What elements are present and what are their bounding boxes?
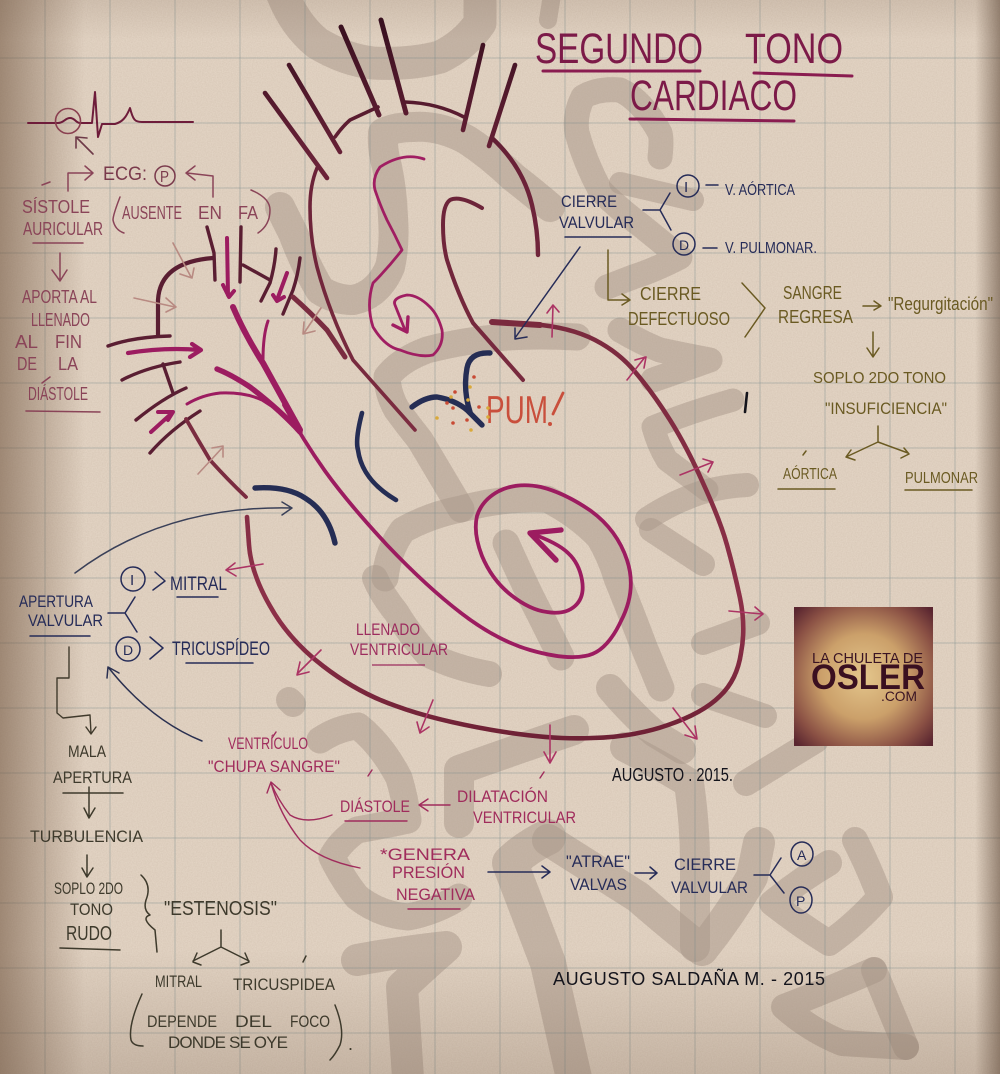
diastole chain: PRESIÓN: [392, 863, 465, 882]
cierre valvular block: VALVULAR: [559, 213, 634, 232]
llenado ventricular label: [350, 620, 448, 665]
atrae valvas block: P: [796, 893, 805, 909]
diastole chain: [208, 732, 576, 909]
mala apertura chain: TONO: [70, 900, 113, 919]
apertura valvular block: VALVULAR: [28, 611, 103, 630]
left notes: sistole auricular: FA: [238, 203, 258, 223]
date note: AUGUSTO . 2015.: [612, 765, 733, 785]
diastole chain: *GENERA: [380, 845, 471, 864]
cierre valvular block: CIERRE: [561, 192, 617, 211]
logo: la chuleta de osler: LA CHULETA DE: [812, 650, 923, 667]
apertura valvular block: TRICUSPÍDEO: [172, 639, 270, 660]
mala apertura chain: DEPENDE: [147, 1012, 217, 1031]
cierre defectuoso block: AÓRTICA: [783, 464, 837, 483]
mala apertura chain: .: [348, 1034, 353, 1054]
cierre defectuoso block: CIERRE: [640, 284, 701, 304]
PUM exclamation: [435, 375, 563, 432]
llenado ventricular label: VENTRICULAR: [350, 640, 448, 659]
left notes: sistole auricular: ECG:: [103, 164, 147, 185]
left notes: sistole auricular: FIN: [55, 332, 82, 352]
left notes: sistole auricular: AUSENTE: [122, 203, 182, 223]
left notes: sistole auricular: APORTA AL: [22, 287, 97, 307]
mala apertura chain: APERTURA: [53, 768, 133, 787]
mala apertura chain: MITRAL: [155, 972, 202, 991]
mala apertura chain: FOCO: [290, 1012, 330, 1031]
diastole chain: VENTRICULAR: [473, 808, 576, 827]
dilation arrows around ventricle: [134, 243, 763, 763]
mala apertura chain: DONDE SE OYE: [168, 1033, 288, 1052]
diastole chain: DILATACIÓN: [457, 787, 548, 806]
ventricular outer wall: [247, 322, 743, 738]
cierre defectuoso block: PULMONAR: [905, 470, 978, 487]
navy valves: [255, 353, 490, 543]
atrae valvas block: A: [797, 847, 807, 863]
apertura valvular block: APERTURA: [19, 592, 94, 611]
diastole chain: DIÁSTOLE: [340, 797, 410, 816]
apertura valvular block: D: [123, 642, 133, 658]
aortic flow curve: [370, 157, 442, 356]
logo: la chuleta de osler: [794, 607, 933, 746]
watermark lettering: [280, 0, 906, 1074]
mala apertura chain: [30, 742, 353, 1060]
apertura valvular block: [19, 502, 292, 741]
mala apertura chain: DEL: [235, 1012, 272, 1031]
impact dots: [435, 375, 490, 432]
cierre valvular block: D: [679, 237, 689, 253]
cierre defectuoso block: SANGRE: [783, 283, 842, 303]
logo: la chuleta de osler: .COM: [881, 688, 917, 704]
squiggle arrow: [57, 647, 96, 734]
cierre valvular block: V. AÓRTICA: [725, 180, 795, 199]
cierre defectuoso block: DEFECTUOSO: [628, 309, 730, 329]
stray mark: [745, 393, 747, 412]
cierre defectuoso block: "INSUFICIENCIA": [825, 399, 947, 418]
left notes: sistole auricular: DIÁSTOLE: [28, 384, 88, 404]
mala apertura chain: "ESTENOSIS": [164, 898, 277, 920]
left atrium walls: [108, 227, 345, 497]
mala apertura chain: SOPLO 2DO: [54, 879, 123, 898]
heart diagram: [108, 20, 743, 738]
cierre defectuoso block: [608, 250, 993, 490]
atrae valvas block: CIERRE: [674, 855, 736, 874]
mala apertura chain: RUDO: [66, 923, 112, 945]
cierre valvular block: V. PULMONAR.: [725, 240, 817, 257]
cierre valvular block: [515, 175, 817, 339]
atrae valvas block: VALVAS: [570, 875, 627, 894]
left notes: sistole auricular: LLENADO: [31, 310, 90, 330]
aorta arch: [265, 20, 538, 430]
left notes: sistole auricular: AURICULAR: [23, 219, 103, 239]
left notes: sistole auricular: SÍSTOLE: [22, 197, 90, 217]
diastole chain: "CHUPA SANGRE": [208, 757, 340, 776]
left notes: sistole auricular: P: [160, 169, 169, 186]
cierre defectuoso block: SOPLO 2DO TONO: [813, 370, 946, 387]
left notes: sistole auricular: DE: [17, 354, 37, 374]
title: CARDIACO: [630, 72, 797, 120]
diastole chain: NEGATIVA: [396, 885, 476, 904]
top segment of ventricular wall: [492, 322, 540, 325]
mala apertura chain: TURBULENCIA: [30, 827, 144, 846]
atrae valvas block: [488, 842, 813, 913]
PUM exclamation: PUM: [486, 389, 548, 432]
diastole chain: VENTRÍCULO: [228, 734, 308, 753]
left notes: sistole auricular: [15, 164, 270, 412]
left notes: sistole auricular: EN: [198, 203, 222, 223]
left notes: sistole auricular: LA: [58, 354, 78, 374]
title: TONO: [745, 25, 843, 73]
atrae valvas block: VALVULAR: [671, 878, 748, 897]
septum and inner magenta flow: [128, 238, 631, 657]
apertura valvular block: MITRAL: [170, 574, 227, 595]
logo: la chuleta de osler: OSLER: [811, 658, 925, 697]
cierre valvular block: I: [684, 179, 688, 196]
left notes: sistole auricular: AL: [15, 332, 38, 352]
mala apertura chain: TRICUSPIDEA: [233, 975, 336, 994]
ecg strip: [28, 92, 193, 154]
atrae valvas block: "ATRAE": [566, 852, 630, 871]
cierre defectuoso block: REGRESA: [778, 307, 853, 327]
mala apertura chain: MALA: [68, 742, 107, 761]
title: [535, 25, 852, 121]
llenado ventricular label: LLENADO: [356, 620, 420, 639]
apertura valvular block: I: [130, 572, 134, 589]
author credit: AUGUSTO SALDAÑA M. - 2015: [553, 968, 825, 989]
title: SEGUNDO: [535, 25, 703, 73]
